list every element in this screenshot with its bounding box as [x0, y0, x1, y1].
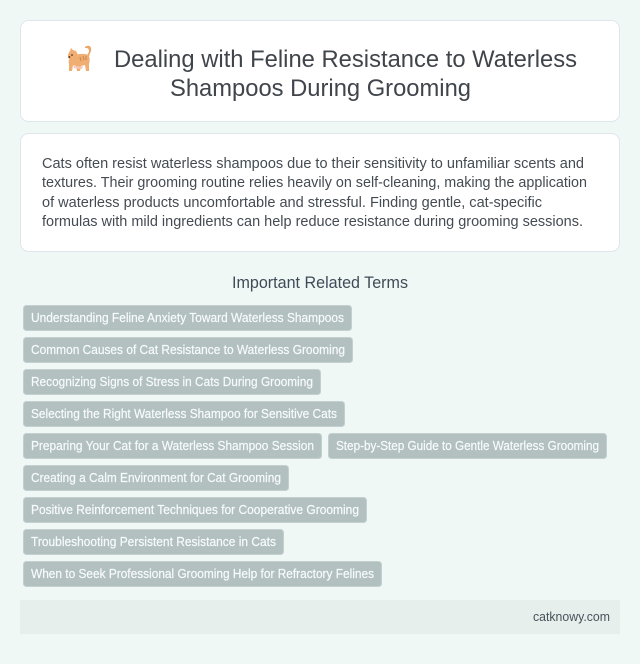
tag: troubleshooting [24, 530, 284, 554]
title [114, 46, 577, 102]
footer [20, 600, 620, 634]
tag: positive reinforcement: Positive Reinforcement Techniques for Cooperative Grooming [31, 502, 359, 517]
text block: description [42, 155, 587, 230]
tag: calm environment [24, 466, 288, 490]
text block: description: formulas with mild ingredients can help reduce resistance during grooming sessions. [42, 213, 583, 230]
tag: preparing: Preparing Your Cat for a Waterless Shampoo Session [31, 438, 314, 453]
panel: description [20, 134, 620, 252]
tag: positive reinforcement [24, 498, 366, 522]
tag: step by step: Step-by-Step Guide to Gentle Waterless Grooming [336, 438, 599, 453]
text block: description: of waterless products uncomfortable and stressful. Finding gentle, cat-specific [42, 194, 542, 211]
tag: selecting shampoo [24, 402, 344, 426]
tag: anxiety [24, 306, 352, 330]
tag: step by step [328, 434, 606, 458]
footer: catknowy.com [533, 609, 610, 624]
heading: related terms: Important Related Terms [232, 274, 408, 292]
icon: cat [68, 46, 91, 71]
tag: professional help [24, 562, 382, 586]
text block: description: Cats often resist waterless shampoos due to their sensitivity to unfamiliar scents and [42, 155, 584, 172]
tag: calm environment: Creating a Calm Environment for Cat Grooming [31, 470, 281, 485]
tag: troubleshooting: Troubleshooting Persistent Resistance in Cats [31, 534, 276, 549]
tag: selecting shampoo: Selecting the Right Waterless Shampoo for Sensitive Cats [31, 406, 337, 421]
tag: causes: Common Causes of Cat Resistance to Waterless Grooming [31, 342, 345, 357]
tag: preparing [24, 434, 322, 458]
panel: title card [20, 20, 620, 122]
title: Shampoos During Grooming [170, 75, 471, 102]
tag: professional help: When to Seek Professional Grooming Help for Refractory Felines [31, 566, 374, 581]
text block: description: textures. Their grooming routine relies heavily on self-cleaning, making the application [42, 174, 587, 191]
tag: anxiety: Understanding Feline Anxiety Toward Waterless Shampoos [31, 310, 344, 325]
title: Dealing with Feline Resistance to Waterless [114, 46, 577, 73]
tag: causes [24, 338, 352, 362]
list: related term tags [24, 306, 606, 586]
tag: stress signs [24, 370, 320, 394]
tag: stress signs: Recognizing Signs of Stress in Cats During Grooming [31, 374, 313, 389]
